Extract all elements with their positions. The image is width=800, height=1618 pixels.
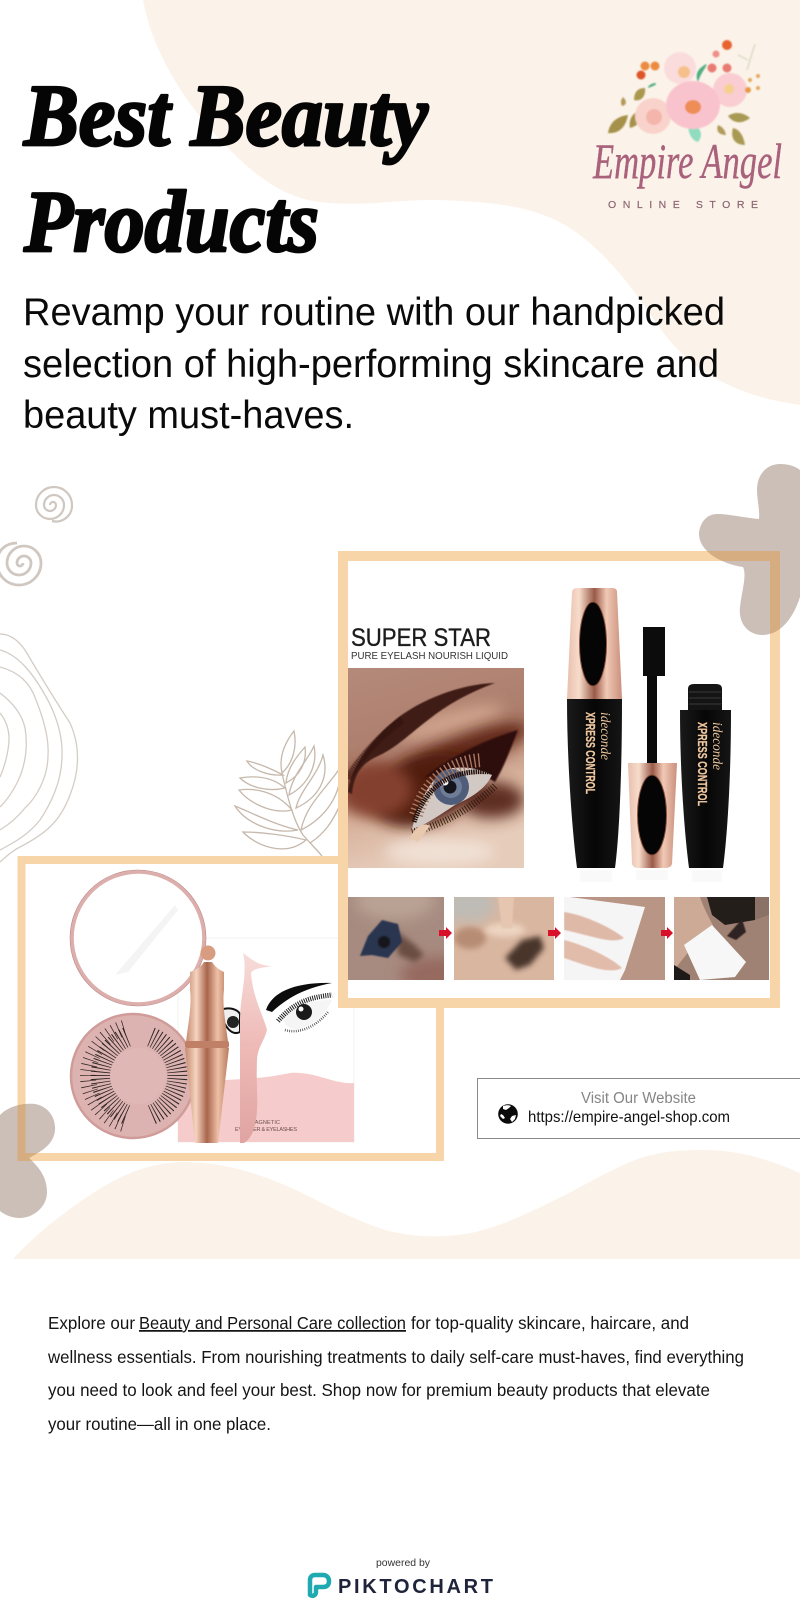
description paragraph: Explore our <box>48 1313 135 1333</box>
panel: mascara frame <box>337 556 775 1003</box>
subtitle: Revamp your routine with our handpicked <box>23 291 725 334</box>
label: visit: Visit Our Website <box>581 1090 696 1107</box>
eye <box>412 767 492 830</box>
icon: globe <box>498 1104 518 1124</box>
title: Best Beauty <box>23 68 429 165</box>
contour rings <box>0 634 78 862</box>
product headline: SUPER STAR <box>351 624 491 652</box>
bottom cream wave <box>13 1150 800 1259</box>
url: https://empire-angel-shop.com <box>528 1109 730 1126</box>
product headline: PURE EYELASH NOURISH LIQUID <box>351 650 508 662</box>
eyeliner bottle <box>185 946 229 1143</box>
mascara tube small: XPRESS CONTROL <box>695 722 710 806</box>
powered by Piktochart: PIKTOCHART <box>338 1576 493 1598</box>
panel: lash kit frame <box>22 860 440 1157</box>
step 2 photo <box>454 897 554 980</box>
eye photo <box>348 668 524 868</box>
tagline: ONLINE STORE <box>608 199 763 211</box>
logo: Empire Angel <box>592 40 782 211</box>
mirror <box>70 870 206 1006</box>
description paragraph <box>47 1313 744 1434</box>
lower lashes <box>412 786 495 832</box>
top cream blob <box>143 0 800 405</box>
website callout <box>478 1078 800 1138</box>
arrow <box>548 927 561 939</box>
mascara tube small: ideconde <box>709 722 724 770</box>
title <box>23 68 429 271</box>
mascara tube small <box>680 684 731 882</box>
mascara tube large: XPRESS CONTROL <box>583 712 598 794</box>
mascara tube large: ideconde <box>597 712 612 760</box>
tweezer <box>240 953 272 1143</box>
leaf outline <box>235 731 342 856</box>
subtitle: beauty must-haves. <box>23 394 354 437</box>
title: Products <box>23 174 319 271</box>
step 1 photo <box>348 897 444 980</box>
arrow <box>439 927 452 939</box>
lash compact <box>71 1014 195 1138</box>
box with eye illustration <box>178 938 354 1142</box>
subtitle <box>23 291 725 437</box>
icon: floral bouquet <box>608 40 760 145</box>
icon: Piktochart logo <box>310 1575 329 1596</box>
powered by Piktochart <box>310 1557 493 1598</box>
box with eye illustration: MAGNETIC <box>250 1120 280 1126</box>
eyebrow <box>348 683 495 794</box>
mascara tube large <box>567 588 622 882</box>
description paragraph: for top-quality skincare, haircare, and <box>411 1313 689 1333</box>
description paragraph: wellness essentials. From nourishing treatments to daily self-care must-haves, find everything <box>47 1347 744 1367</box>
mascara wand <box>628 627 677 880</box>
blob: bottom left <box>0 1104 56 1218</box>
step 3 photo <box>564 897 665 980</box>
step photos <box>348 897 769 980</box>
description paragraph: you need to look and feel your best. Shop now for premium beauty products that elevate <box>48 1380 710 1400</box>
arrow <box>661 927 673 939</box>
blob: top right <box>699 464 800 635</box>
swirl: small <box>36 487 72 522</box>
box with eye illustration: EYELINER & EYELASHES <box>235 1127 297 1133</box>
powered by Piktochart: powered by <box>376 1557 431 1569</box>
eye wing <box>424 730 518 782</box>
description paragraph: your routine—all in one place. <box>48 1414 271 1434</box>
step 4 photo <box>674 897 769 980</box>
description paragraph: Beauty and Personal Care collection <box>139 1313 406 1333</box>
upper lashes <box>416 760 482 815</box>
subtitle: selection of high-performing skincare and <box>23 343 719 386</box>
swirl: large <box>0 543 41 585</box>
